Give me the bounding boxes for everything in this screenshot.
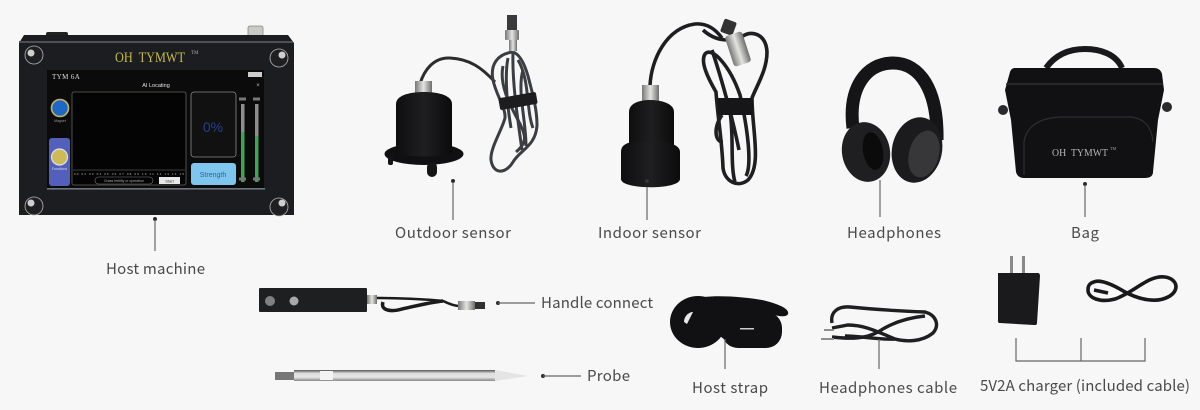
screen: AI Locating (142, 83, 170, 89)
callout line: probe (541, 374, 581, 378)
screen: Functions (52, 167, 67, 171)
screen: Start (165, 178, 175, 184)
label: Probe: Probe (587, 365, 630, 386)
charger (998, 256, 1040, 325)
callout line: outdoor sensor (451, 179, 455, 220)
label: Headphones: Headphones (847, 222, 941, 243)
indoor sensor (621, 18, 767, 187)
screen: Magnet (54, 119, 66, 123)
label: Headphones cable: Headphones cable (819, 377, 957, 398)
callout line: headphones cable (878, 339, 880, 369)
label: Handle connect: Handle connect (541, 292, 653, 313)
callout line: host strap (724, 339, 726, 369)
label: Outdoor sensor: Outdoor sensor (395, 222, 511, 243)
label: Indoor sensor: Indoor sensor (598, 222, 701, 243)
callout line: bag (1083, 182, 1087, 217)
label: Host machine: Host machine (106, 258, 205, 279)
callout line: indoor sensor (646, 187, 648, 220)
label: Bag: Bag (1071, 222, 1100, 243)
host strap (670, 296, 788, 348)
outdoor sensor (384, 15, 538, 177)
callout line: handle connect (496, 301, 535, 305)
bag logo: OH TYMWT (1052, 147, 1108, 159)
screen: Strength (200, 172, 226, 179)
corner screws (25, 46, 288, 216)
screen: 0% (203, 119, 223, 135)
screen: 00 02 03 04 05 06 07 08 09 10 11 12 13 14 15 (74, 172, 184, 176)
screen: TYM 6A (52, 73, 80, 81)
screen: × (256, 83, 260, 89)
screen: Grass fertility or operation (104, 179, 144, 183)
host machine device: TM (191, 51, 199, 56)
handle connector (259, 288, 485, 312)
screen (47, 70, 265, 190)
bag (998, 49, 1172, 178)
label: Host strap: Host strap (692, 377, 768, 398)
logo text: OH TYMWT (115, 50, 185, 66)
headphones cable (821, 307, 936, 341)
callout line: host machine (153, 217, 157, 251)
included USB cable (1088, 277, 1176, 300)
headphones (837, 63, 948, 187)
bag: TM (1110, 146, 1116, 151)
host machine device (19, 26, 294, 216)
label: 5V2A charger (included cable): 5V2A charger (included cable) (980, 375, 1190, 396)
probe (275, 370, 528, 381)
bracket line: charger (1016, 338, 1145, 361)
callout line: headphones (879, 180, 881, 217)
